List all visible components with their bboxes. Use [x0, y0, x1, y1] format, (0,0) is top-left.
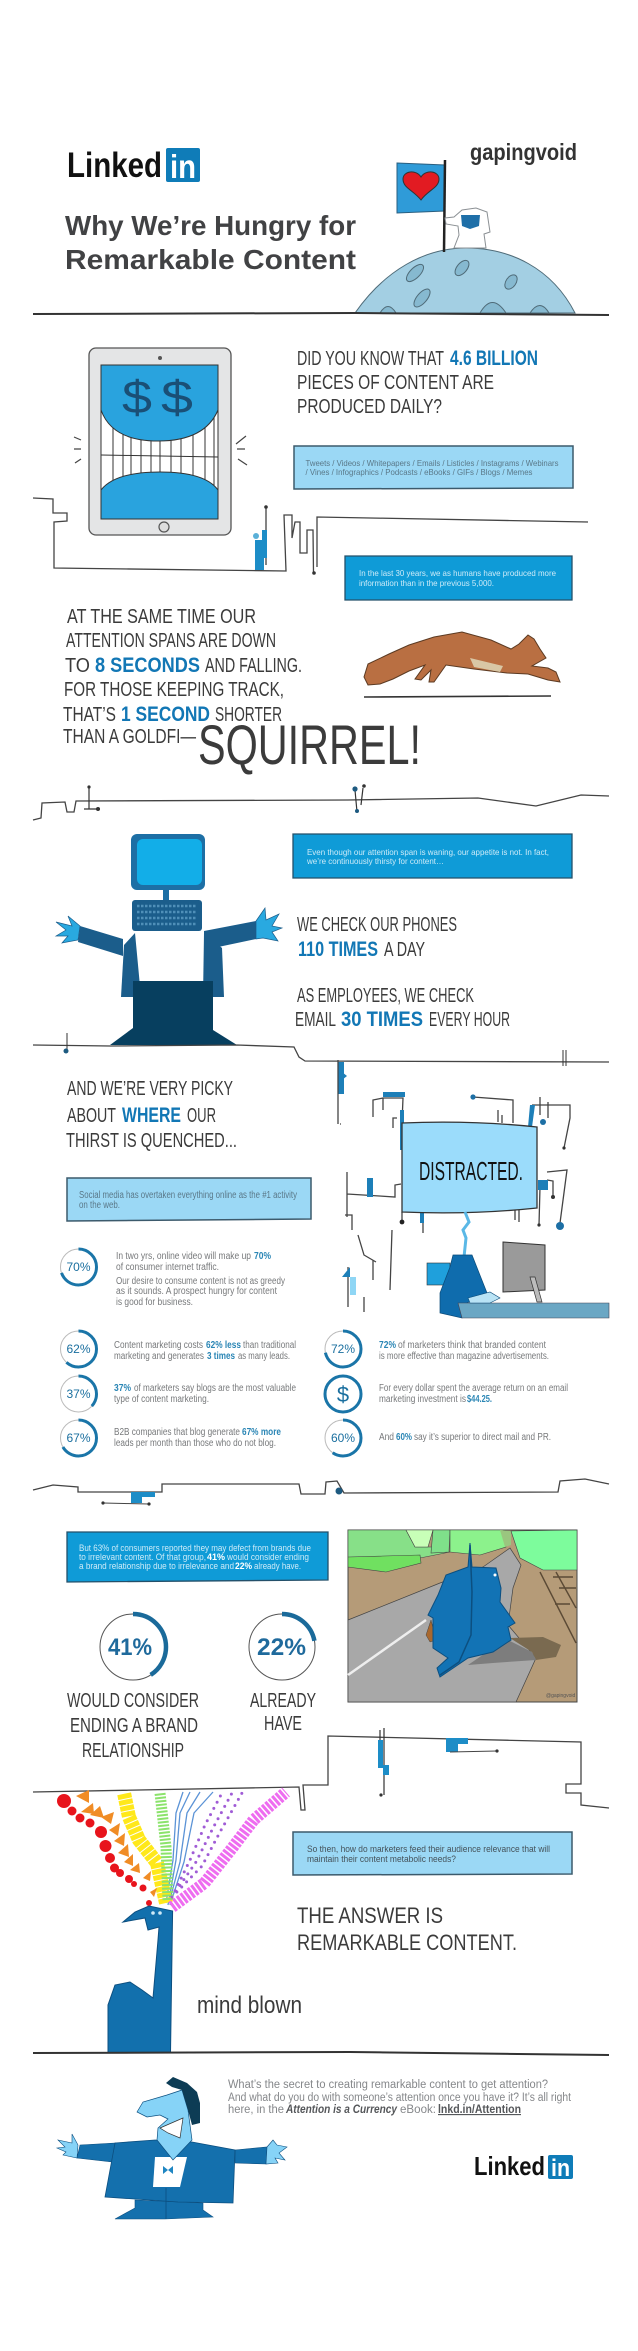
callout: how do marketers feed: maintain their content metabolic needs?: [307, 1854, 456, 1864]
stat: 37%: [60, 1376, 296, 1412]
stat: 62%: than traditional: [243, 1340, 296, 1351]
callout: social media: [67, 1178, 311, 1221]
closing text: eBook:: [400, 2104, 436, 2116]
phones and email stats text: 110 TIMES: [298, 938, 378, 961]
phones and email stats text: EVERY HOUR: [429, 1009, 510, 1031]
attention span text: THAT’S: [63, 704, 116, 726]
callout: content types: [294, 446, 573, 489]
wire divider 5: [33, 1728, 609, 1810]
stat: 62%: Content marketing costs: [114, 1340, 203, 1351]
did you know text: [297, 347, 538, 418]
wire divider 1: [33, 498, 588, 575]
stat ring: 22%: [249, 1614, 315, 1680]
callout: defect from brands: [67, 1532, 328, 1582]
stat: 72%: [325, 1331, 549, 1367]
picky text: AND WE’RE VERY PICKY: [67, 1078, 233, 1100]
illustration: grinning man: [57, 2077, 287, 2219]
stat: 60%: 60%: [331, 1431, 355, 1445]
icon: hungry tablet: $: [161, 371, 193, 423]
callout: defect from brands: 22%: [235, 1561, 252, 1571]
closing text: [228, 2079, 572, 2116]
answer text: REMARKABLE CONTENT.: [297, 1930, 517, 1955]
attention span text: 8 SECONDS: [95, 654, 200, 677]
phones and email stats text: A DAY: [384, 939, 425, 961]
stat: dollar return: For every dollar spent the average return on an email: [379, 1383, 568, 1394]
title: [65, 210, 356, 275]
illustration: computer-headed man: [56, 834, 282, 1045]
footer divider line: [33, 2052, 609, 2055]
callout: defect from brands: to irrelevant content. Of that group,: [79, 1552, 206, 1562]
callout: appetite: Even though our attention span is waning, our appetite is not. In fact,: [307, 847, 549, 857]
attention span text: 1 SECOND: [121, 703, 210, 726]
picky text: WHERE: [122, 1104, 181, 1127]
stat: 67%: 67% more: [242, 1427, 281, 1438]
stat: 62%: 62%: [66, 1342, 91, 1356]
attention span text: [63, 606, 421, 776]
stat: dollar return: $: [337, 1382, 349, 1407]
attention span text: THAN A GOLDFI—: [63, 726, 196, 748]
stat: 62%: 3 times: [207, 1351, 235, 1362]
LinkedIn logo: Linked: [67, 146, 162, 185]
callout: content types: / Vines / Infographics / Podcasts / eBooks / GIFs / Blogs / Memes: [306, 467, 532, 477]
header divider line: [33, 313, 609, 315]
stat: 37%: 37%: [66, 1387, 91, 1401]
attention span text: AND FALLING.: [205, 655, 302, 677]
stat ring: 41%: [100, 1614, 166, 1680]
stat: 62%: [60, 1331, 296, 1367]
stat: dollar return: [325, 1376, 568, 1412]
stat: 70%: is good for business.: [116, 1297, 193, 1308]
title: Why We’re Hungry for: [65, 210, 356, 241]
closing text: Attention is a Currency: [285, 2104, 398, 2116]
stat: 37%: of marketers say blogs are the most valuable: [134, 1383, 296, 1394]
callout: defect from brands: But 63% of consumers reported they may defect from brands due: [79, 1543, 311, 1553]
illustration: mind blown rainbow: [57, 1790, 286, 2053]
phones and email stats text: WE CHECK OUR PHONES: [297, 914, 457, 936]
stat: 60%: 60%: [396, 1432, 412, 1443]
LinkedIn logo: in: [170, 148, 196, 185]
attention span text: AT THE SAME TIME OUR: [67, 606, 256, 628]
attention span text: ATTENTION SPANS ARE DOWN: [66, 630, 276, 652]
did you know text: PRODUCED DAILY?: [297, 396, 442, 418]
stat: 70%: [60, 1249, 285, 1308]
stat: 72%: of marketers think that branded content: [398, 1340, 546, 1351]
closing text: And what do you do with someone’s attention once you have it? It’s all right: [228, 2092, 572, 2104]
LinkedIn footer logo: in: [551, 2155, 570, 2182]
callout: defect from brands: already have.: [254, 1561, 301, 1571]
mind blown caption: mind blown: [197, 1992, 302, 2019]
picky text: OUR: [187, 1105, 216, 1127]
answer text: [297, 1903, 517, 1955]
did you know text: PIECES OF CONTENT ARE: [297, 372, 494, 394]
wire divider 3: [33, 1033, 609, 1066]
icon: hungry tablet: $: [122, 371, 152, 423]
illustration: moon with astronaut and flag: [355, 160, 575, 313]
phones and email stats text: EMAIL: [295, 1009, 336, 1031]
stat: 67%: B2B companies that blog generate: [114, 1427, 240, 1438]
picky text: ABOUT: [67, 1105, 116, 1127]
stat: dollar return: marketing investment is: [379, 1394, 466, 1405]
gapingvoid logo: gapingvoid: [470, 139, 577, 165]
closing text: here, in the: [228, 2104, 284, 2116]
phones and email stats text: AS EMPLOYEES, WE CHECK: [297, 985, 474, 1007]
stat: dollar return: $44.25.: [467, 1394, 492, 1405]
stat: 60%: say it’s superior to direct mail and PR.: [414, 1432, 551, 1443]
stat: 70%: Our desire to consume content is not as greedy: [116, 1276, 285, 1287]
illustration: dinosaur walking on a road: [348, 1530, 577, 1702]
ring captions: ENDING A BRAND: [70, 1715, 198, 1737]
attention span text: TO: [65, 655, 90, 677]
title: Remarkable Content: [65, 244, 356, 275]
ring captions: WOULD CONSIDER: [67, 1690, 199, 1712]
did you know text: 4.6 BILLION: [450, 347, 538, 370]
ring captions: HAVE: [264, 1713, 302, 1735]
stat: 70%: 70%: [254, 1251, 271, 1262]
stat: 62%: 62% less: [206, 1340, 241, 1351]
stat: 62%: marketing and generates: [114, 1351, 204, 1362]
stat ring: 22%: 22%: [257, 1634, 306, 1661]
callout: social media: on the web.: [79, 1200, 120, 1211]
stat: 60%: [325, 1420, 551, 1456]
icon: hungry tablet: [74, 348, 247, 535]
ring captions: ALREADY: [250, 1690, 316, 1712]
closing text: What’s the secret to creating remarkable content to get attention?: [228, 2079, 548, 2091]
phones and email stats text: 30 TIMES: [341, 1008, 423, 1031]
illustration: dinosaur walking on a road: @gapingvoid: [546, 1693, 575, 1699]
closing text: lnkd.in/Attention: [438, 2104, 521, 2116]
callout: 30 years: [345, 556, 572, 600]
stat: 70%: of consumer internet traffic.: [116, 1262, 219, 1273]
stat: 72%: 72%: [379, 1340, 396, 1351]
stat: 67%: leads per month than those who do not blog.: [114, 1438, 276, 1449]
illustration: distracted worker: [338, 1060, 609, 1318]
stat: 70%: 70%: [66, 1260, 91, 1274]
did you know text: DID YOU KNOW THAT: [297, 348, 444, 370]
ring captions: [67, 1690, 316, 1762]
stat ring: 41%: 41%: [108, 1634, 152, 1661]
picky text: [66, 1078, 237, 1152]
callout: defect from brands: 41%: [207, 1552, 225, 1562]
LinkedIn footer logo: Linked: [474, 2151, 545, 2181]
callout: appetite: [293, 834, 572, 878]
callout: how do marketers feed: [293, 1832, 572, 1875]
callout: 30 years: In the last 30 years, we as humans have produced more: [359, 568, 556, 578]
stat: 70%: In two yrs, online video will make up: [116, 1251, 251, 1262]
icon: squirrel: [364, 632, 560, 697]
attention span text: FOR THOSE KEEPING TRACK,: [64, 679, 284, 701]
callout: how do marketers feed: So then, how do marketers feed their audience relevance that will: [307, 1844, 550, 1854]
attention span text: SHORTER: [215, 704, 282, 726]
wire divider 2: [33, 784, 609, 820]
wire divider 4: [33, 1479, 609, 1506]
answer text: THE ANSWER IS: [297, 1903, 443, 1928]
callout: appetite: we’re continuously thirsty for content…: [306, 856, 444, 866]
callout: defect from brands: would consider ending: [226, 1552, 309, 1562]
ring captions: RELATIONSHIP: [82, 1740, 184, 1762]
stat: 67%: [60, 1420, 281, 1456]
stat: 70%: as it sounds. A prospect hungry for content: [116, 1286, 277, 1297]
stat: 67%: 67%: [66, 1431, 91, 1445]
stat: 37%: 37%: [114, 1383, 131, 1394]
stat: 72%: is more effective than magazine advertisements.: [379, 1351, 549, 1362]
illustration: distracted worker: DISTRACTED.: [419, 1156, 523, 1186]
picky text: THIRST IS QUENCHED...: [66, 1130, 237, 1152]
callout: 30 years: information than in the previous 5,000.: [359, 578, 494, 588]
attention span text: SQUIRREL!: [198, 713, 421, 776]
stat: 60%: And: [379, 1432, 394, 1443]
stat: 62%: as many leads.: [238, 1351, 290, 1362]
stat: 72%: 72%: [331, 1342, 355, 1356]
callout: defect from brands: a brand relationship due to irrelevance and: [79, 1561, 234, 1571]
stat: 37%: type of content marketing.: [114, 1394, 209, 1405]
callout: social media: Social media has overtaken everything online as the #1 activity: [79, 1190, 297, 1201]
phones and email stats text: [295, 914, 510, 1031]
callout: content types: Tweets / Videos / Whitepapers / Emails / Listicles / Instagrams / Webinars: [306, 458, 558, 468]
